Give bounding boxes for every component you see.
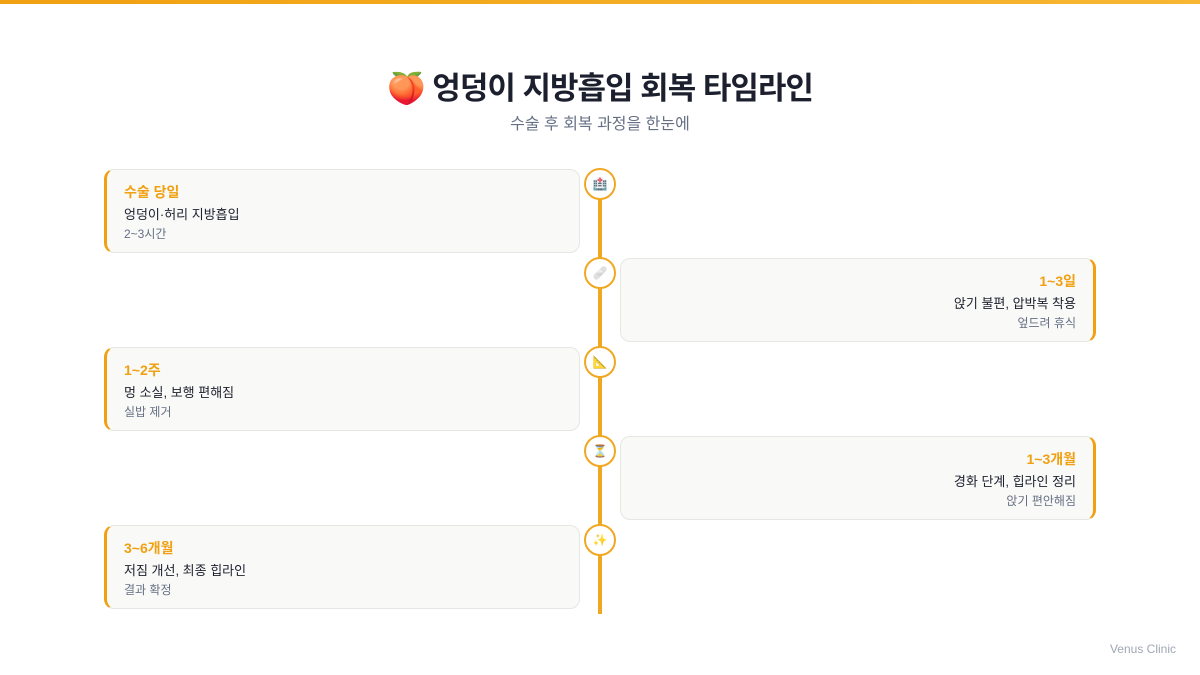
card: 1-2 weeks: 실밥 제거: [124, 405, 172, 419]
icon: bandage: 🩹: [593, 266, 607, 280]
footer: Venus Clinic: [1110, 642, 1176, 656]
icon: ruler: [584, 346, 616, 378]
card: 1-3 months: 경화 단계, 힙라인 정리: [954, 474, 1076, 489]
icon: sparkles: ✨: [593, 533, 607, 547]
card: surgery day: 2~3시간: [124, 227, 166, 241]
card: 3-6 months: 저짐 개선, 최종 힙라인: [124, 563, 246, 578]
card: 3-6 months: 결과 확정: [124, 583, 172, 597]
icon: hourglass: [584, 435, 616, 467]
card: surgery day: 수술 당일: [124, 184, 179, 200]
timeline line: [598, 184, 602, 614]
card: 1-3 days: 1~3일: [1039, 273, 1076, 289]
card: 1-3 days: 앉기 불편, 압박복 착용: [954, 296, 1076, 311]
card: 1-3 months: 1~3개월: [1026, 451, 1076, 467]
icon: hospital: 🏥: [593, 177, 607, 191]
card: surgery day: [104, 169, 580, 253]
card: 1-3 months: [620, 436, 1096, 520]
icon: hospital: [584, 168, 616, 200]
card: 1-3 days: 엎드려 휴식: [1017, 316, 1076, 330]
icon: sparkles: [584, 524, 616, 556]
card: 3-6 months: [104, 525, 580, 609]
card: 1-3 months: 앉기 편안해짐: [1006, 494, 1076, 508]
card: surgery day: 엉덩이·허리 지방흡입: [124, 207, 240, 222]
card: 1-2 weeks: 멍 소실, 보행 편해짐: [124, 385, 234, 400]
icon: bandage: [584, 257, 616, 289]
subtitle: 수술 후 회복 과정을 한눈에: [510, 116, 690, 133]
card: 1-2 weeks: [104, 347, 580, 431]
icon: hourglass: ⏳: [593, 444, 607, 458]
title: 🍑 엉덩이 지방흡입 회복 타임라인: [387, 71, 813, 106]
card: 1-3 days: [620, 258, 1096, 342]
card: 3-6 months: 3~6개월: [124, 540, 174, 556]
icon: ruler: 📐: [593, 355, 607, 369]
card: 1-2 weeks: 1~2주: [124, 362, 161, 378]
